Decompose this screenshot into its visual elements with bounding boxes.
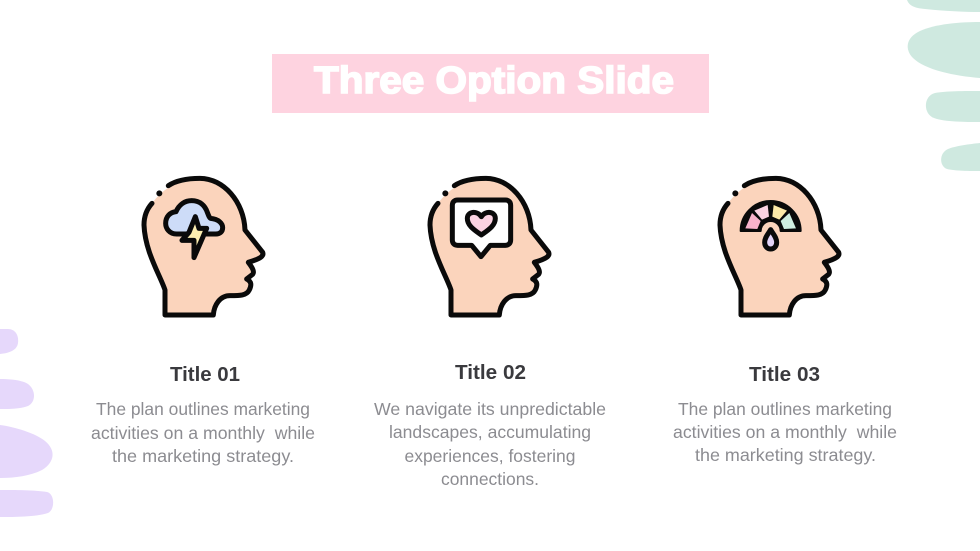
drop <box>765 230 777 249</box>
icon: head with gauge and drop <box>720 178 839 315</box>
option 2 <box>374 178 606 489</box>
heading: Title 03 <box>749 364 820 386</box>
text block <box>91 399 315 466</box>
text block: activities on a monthly while <box>673 422 897 442</box>
heading: Title 02 <box>455 362 526 384</box>
option 3 <box>673 178 897 465</box>
icon: head with storm cloud <box>144 178 263 315</box>
title banner <box>272 54 709 113</box>
text block: the marketing strategy. <box>695 445 876 465</box>
gauge <box>741 201 801 231</box>
title banner: Three Option Slide <box>314 60 674 102</box>
text block <box>374 399 606 489</box>
text block <box>673 399 897 465</box>
text block: The plan outlines marketing <box>96 399 310 419</box>
icon: head with heart speech bubble <box>430 178 549 315</box>
purple blobs bottom left <box>0 329 53 517</box>
text block: the marketing strategy. <box>112 446 294 466</box>
green blobs top right <box>907 0 980 171</box>
text block: The plan outlines marketing <box>678 399 892 419</box>
text block: We navigate its unpredictable <box>374 399 606 419</box>
text block: experiences, fostering <box>404 446 576 466</box>
text block: landscapes, accumulating <box>389 422 591 442</box>
option 1 <box>91 178 315 466</box>
text block: activities on a monthly while <box>91 423 315 443</box>
heading: Title 01 <box>170 364 240 386</box>
text block: connections. <box>441 469 539 489</box>
